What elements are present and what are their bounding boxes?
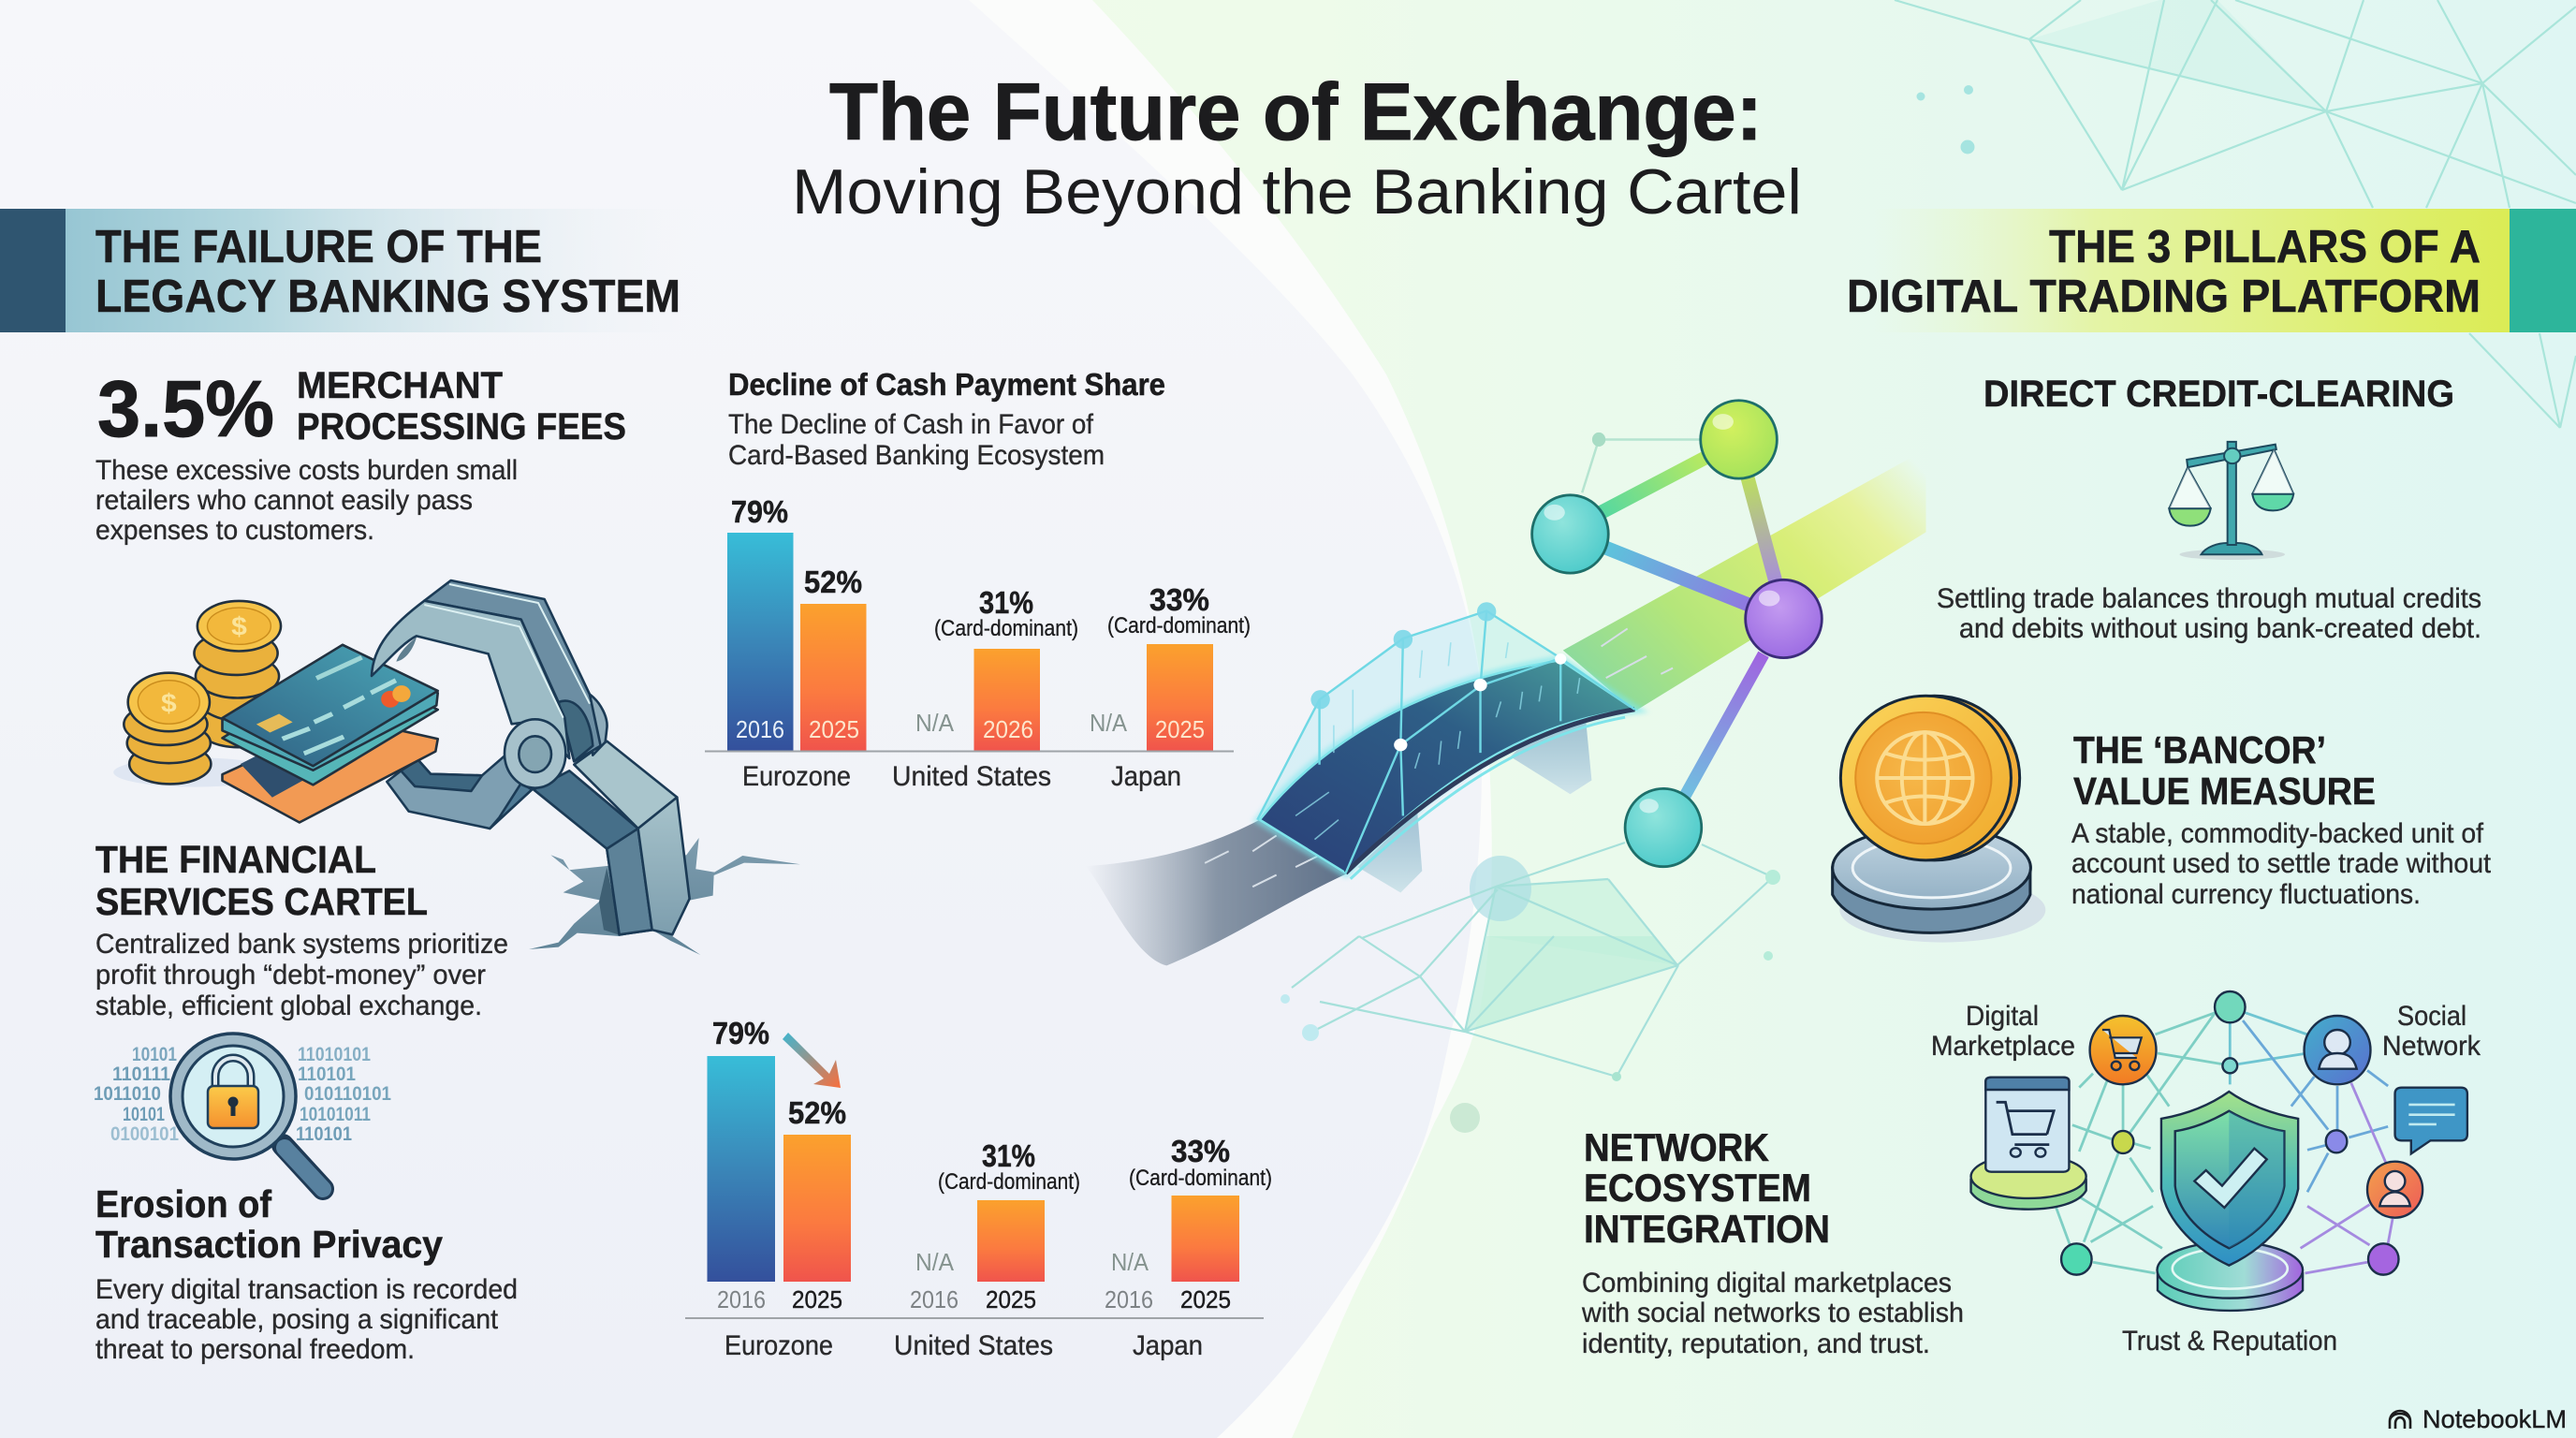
arrow: decline xyxy=(783,1033,841,1088)
bridge cables xyxy=(1257,611,1634,873)
stat: merchant processing fees xyxy=(95,365,626,546)
bar chart: bottom: 2025 xyxy=(986,1285,1036,1313)
bar chart: top: 2026 xyxy=(983,715,1033,743)
cards xyxy=(223,718,438,823)
bar chart: top: Eurozone xyxy=(742,761,851,792)
text: financial services cartel: SERVICES CARTEL xyxy=(95,880,428,923)
text: direct credit clearing xyxy=(1937,374,2481,644)
bar chart: top: N/A xyxy=(915,709,955,737)
bar chart: bottom: 2016 xyxy=(717,1285,766,1313)
bar chart: top: 2025 xyxy=(809,715,859,743)
bridge glass panels xyxy=(1257,611,1560,820)
subtitle: Moving Beyond the Banking Cartel xyxy=(792,156,1802,227)
coin stack: front xyxy=(124,673,211,784)
stat: merchant processing fees: expenses to customers. xyxy=(95,515,374,546)
coin stack: rear xyxy=(194,601,282,747)
bar chart: bottom: 2025 xyxy=(1180,1285,1231,1313)
icon: magnifier with lock over binary xyxy=(94,1034,391,1189)
node: top xyxy=(2215,991,2246,1022)
icon: magnifier with lock over binary: 11010101 xyxy=(298,1044,371,1065)
panel heading: three pillars xyxy=(1847,209,2576,332)
bar chart: top: Japan xyxy=(1111,761,1181,792)
crack in ground xyxy=(529,838,800,955)
text: network ecosystem integration: INTEGRATION xyxy=(1584,1207,1830,1251)
bar chart: bottom: 52% xyxy=(788,1095,846,1130)
network links xyxy=(1582,439,1776,796)
coin stacks and cards: $ xyxy=(161,690,177,718)
text: bancor value measure: A stable, commodity-backed unit of xyxy=(2071,818,2484,849)
labels: network diagram: Digital xyxy=(1966,1001,2039,1032)
icon: magnifier with lock over binary: 0100101 xyxy=(110,1123,179,1145)
trust base xyxy=(2157,1242,2303,1311)
labels: network diagram xyxy=(1931,1001,2481,1357)
bar chart: bottom: N/A xyxy=(1111,1248,1149,1276)
chart heading: decline of cash xyxy=(728,367,1165,471)
node: purple xyxy=(1746,580,1822,658)
node: reputation user xyxy=(2367,1162,2422,1218)
text: bancor value measure: VALUE MEASURE xyxy=(2073,770,2376,813)
text: erosion of transaction privacy: Erosion of xyxy=(95,1182,271,1225)
bar chart: top: 2016 xyxy=(736,715,784,743)
diagram: trust network xyxy=(1971,991,2467,1311)
text: financial services cartel: Centralized bank systems prioritize xyxy=(95,929,508,960)
panel heading: failure of legacy banking: THE FAILURE OF THE xyxy=(95,222,542,272)
bar chart: bottom: Japan xyxy=(1133,1330,1203,1361)
icon: magnifier with lock over binary: 010110101 xyxy=(304,1083,391,1105)
text: erosion of transaction privacy: Every digital transaction is recorded xyxy=(95,1274,518,1305)
text: network ecosystem integration: identity, reputation, and trust. xyxy=(1582,1328,1930,1359)
background: left pale panel xyxy=(0,0,1482,1438)
upper claw jaw and pivot xyxy=(372,580,607,788)
chart heading: decline of cash: Decline of Cash Payment Share xyxy=(728,367,1165,402)
node: social network user xyxy=(2305,1016,2370,1084)
stat: merchant processing fees: 3.5% xyxy=(97,365,274,454)
labels: network diagram: Trust & Reputation xyxy=(2122,1326,2337,1357)
labels: network diagram: Social xyxy=(2397,1001,2466,1032)
brand: NotebookLM: NotebookLM xyxy=(2422,1405,2567,1433)
bar chart: bottom: 79% xyxy=(712,1016,769,1050)
bar chart: top xyxy=(705,494,1251,792)
text: direct credit clearing: and debits without using bank-created debt. xyxy=(1959,613,2481,644)
shield with checkmark xyxy=(2161,1092,2298,1266)
bar chart: top: 52% xyxy=(804,565,862,599)
icon: magnifier with lock over binary: 10101 xyxy=(132,1044,177,1065)
bar chart: top: 79% xyxy=(731,494,788,529)
bar chart: top: 31% xyxy=(979,585,1033,620)
icon: magnifier with lock over binary: 110101 xyxy=(296,1123,352,1145)
bridge piers xyxy=(1511,721,1591,794)
icon: magnifier with lock over binary: 1011010 xyxy=(94,1083,161,1105)
icon: bancor coin on platform xyxy=(1833,696,2045,943)
title xyxy=(792,67,1802,227)
text: network ecosystem integration: NETWORK xyxy=(1584,1125,1769,1169)
bar chart: top: N/A xyxy=(1090,709,1128,737)
text: direct credit clearing: DIRECT CREDIT-CLEARING xyxy=(1983,374,2454,415)
bar chart: bottom: United States xyxy=(894,1330,1053,1361)
icon: magnifier with lock over binary: 110101 xyxy=(298,1064,356,1085)
bridge glow xyxy=(1260,660,1634,873)
bar chart: top: 33% xyxy=(1149,582,1209,617)
panel heading: three pillars: THE 3 PILLARS OF A xyxy=(2049,222,2481,272)
text: financial services cartel: THE FINANCIAL xyxy=(95,838,376,881)
coin stacks and cards: $ xyxy=(231,613,247,641)
marketplace platform and window xyxy=(1971,1078,2086,1210)
text: erosion of transaction privacy: Transaction Privacy xyxy=(95,1223,443,1266)
network lines: bottom center xyxy=(1281,843,1780,1133)
bridge deck xyxy=(1260,660,1634,873)
text: network ecosystem integration: ECOSYSTEM xyxy=(1584,1166,1811,1210)
stat: merchant processing fees: retailers who cannot easily pass xyxy=(95,485,473,516)
text: bancor value measure xyxy=(2071,728,2491,910)
stat: merchant processing fees: These excessive costs burden small xyxy=(95,455,518,486)
text: network ecosystem integration xyxy=(1581,1125,1964,1359)
road: green digital side xyxy=(1563,449,1926,712)
text: financial services cartel: stable, efficient global exchange. xyxy=(95,990,482,1021)
stat: merchant processing fees: MERCHANT xyxy=(297,365,503,406)
bridge deck streaks xyxy=(1295,642,1580,840)
icon: coins and cards gripped by claw xyxy=(113,580,800,955)
text: bancor value measure: THE ‘BANCOR’ xyxy=(2073,728,2326,771)
road: grey legacy side xyxy=(1086,820,1348,965)
text: direct credit clearing: Settling trade balances through mutual credits xyxy=(1937,583,2481,614)
icon: magnifier with lock over binary: 110111 xyxy=(112,1064,170,1085)
labels: network diagram: Network xyxy=(2382,1031,2481,1062)
chart heading: decline of cash: The Decline of Cash in Favor of xyxy=(728,409,1094,440)
node: teal lower xyxy=(1625,788,1702,867)
labels: network diagram: Marketplace xyxy=(1931,1031,2075,1062)
bar chart: bottom: 2016 xyxy=(1105,1285,1153,1313)
node: teal left xyxy=(1532,495,1608,573)
title: The Future of Exchange: xyxy=(829,67,1763,157)
text: bancor value measure: national currency fluctuations. xyxy=(2071,879,2421,910)
text: erosion of transaction privacy: threat to personal freedom. xyxy=(95,1334,415,1365)
bar chart: bottom: 2025 xyxy=(792,1285,842,1313)
text: financial services cartel xyxy=(95,838,508,1021)
lower claw jaw and arm xyxy=(387,741,690,934)
bar chart: bottom: 33% xyxy=(1171,1134,1230,1168)
illustration: bridge and network nodes xyxy=(1086,401,1926,965)
node: digital marketplace cart xyxy=(2090,1016,2157,1084)
panel heading: three pillars: DIGITAL TRADING PLATFORM xyxy=(1847,271,2481,322)
text: financial services cartel: profit through “debt-money” over xyxy=(95,960,486,990)
text: network ecosystem integration: Combining digital marketplaces xyxy=(1582,1268,1952,1299)
stat: merchant processing fees: PROCESSING FEES xyxy=(297,406,626,448)
background: white transition band xyxy=(0,0,1492,1438)
bar chart: bottom: N/A xyxy=(915,1248,955,1276)
icon: magnifier with lock over binary: 10101011 xyxy=(300,1104,371,1125)
network lines: top right xyxy=(1895,0,2576,428)
bar chart: top: (Card-dominant) xyxy=(1107,613,1251,638)
bar chart: top: (Card-dominant) xyxy=(934,616,1078,641)
icon: magnifier with lock over binary: 10101 xyxy=(123,1104,165,1125)
bar chart: bottom: (Card-dominant) xyxy=(938,1169,1080,1195)
chart heading: decline of cash: Card-Based Banking Ecosystem xyxy=(728,440,1105,471)
bar chart: bottom xyxy=(685,1016,1272,1361)
bar chart: bottom: 31% xyxy=(982,1138,1035,1173)
bar chart: bottom: 2016 xyxy=(910,1285,959,1313)
bar chart: top: United States xyxy=(892,761,1051,792)
bar chart: top: 2025 xyxy=(1155,715,1205,743)
bar chart: bottom: (Card-dominant) xyxy=(1129,1166,1272,1191)
panel heading: failure of legacy banking xyxy=(0,209,702,332)
network connecting links xyxy=(2056,1013,2393,1273)
text: bancor value measure: account used to settle trade without xyxy=(2071,848,2491,879)
icon: balance scale xyxy=(2169,442,2293,560)
bar chart: bottom: Eurozone xyxy=(724,1330,833,1361)
panel heading: failure of legacy banking: LEGACY BANKING SYSTEM xyxy=(95,271,681,322)
node: lime xyxy=(1701,401,1777,478)
node: chat bubble xyxy=(2395,1088,2467,1153)
text: erosion of transaction privacy xyxy=(95,1182,518,1365)
text: erosion of transaction privacy: and traceable, posing a significant xyxy=(95,1304,498,1335)
coin stacks and cards xyxy=(113,601,438,823)
text: network ecosystem integration: with social networks to establish xyxy=(1581,1298,1964,1328)
